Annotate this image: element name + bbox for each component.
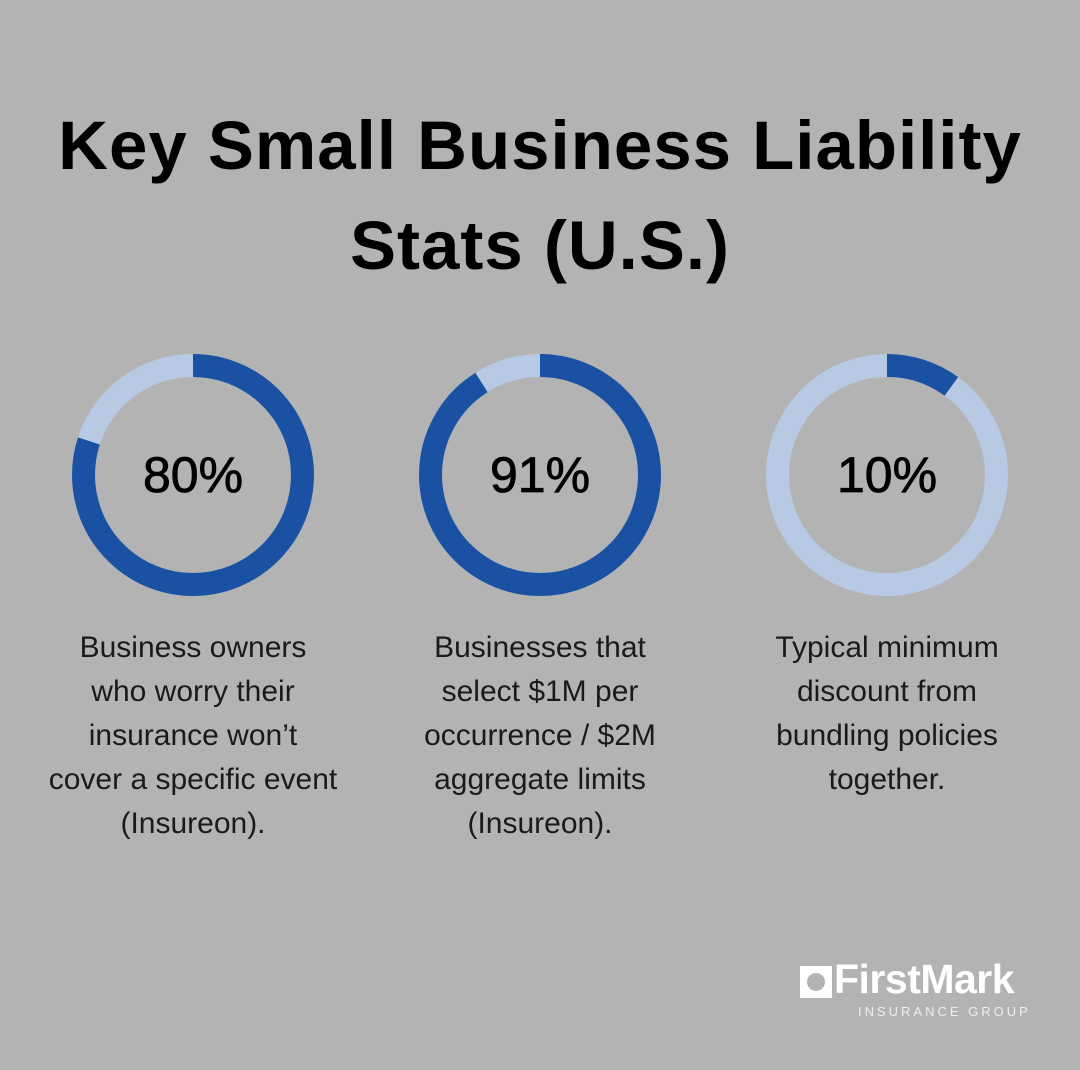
title xyxy=(58,107,1022,284)
description: 10%: together. xyxy=(829,763,945,796)
description: 10%: bundling policies xyxy=(776,719,998,752)
title: Stats (U.S.) xyxy=(350,207,730,284)
description: 80%: insurance won’t xyxy=(89,719,297,752)
description: 91%: select $1M per xyxy=(442,675,638,708)
description: 91% xyxy=(424,631,656,840)
description: 10%: discount from xyxy=(797,675,977,708)
description: 91%: occurrence / $2M xyxy=(424,719,656,752)
value: 91%: 91% xyxy=(490,447,590,503)
description: 80%: (Insureon). xyxy=(120,807,266,840)
title: Key Small Business Liability xyxy=(58,107,1022,184)
donut: 91% xyxy=(430,366,650,584)
logo: FirstMark xyxy=(834,956,1014,1002)
description: 91%: Businesses that xyxy=(434,631,646,664)
donut: 10% xyxy=(778,366,996,584)
description: 80% xyxy=(49,631,337,840)
description: 91%: aggregate limits xyxy=(434,763,646,796)
description: 10% xyxy=(775,631,999,796)
description: 80%: cover a specific event xyxy=(49,763,337,796)
value: 80%: 80% xyxy=(143,447,243,503)
donut charts xyxy=(72,354,1008,596)
logo: INSURANCE GROUP xyxy=(858,1004,1031,1019)
description: 80%: Business owners xyxy=(80,631,306,664)
description: 91%: (Insureon). xyxy=(467,807,613,840)
description: 10%: Typical minimum xyxy=(775,631,999,664)
logo xyxy=(800,956,1031,1019)
description: 80%: who worry their xyxy=(91,675,295,708)
value: 10%: 10% xyxy=(837,447,937,503)
donut: 80% xyxy=(84,366,302,584)
